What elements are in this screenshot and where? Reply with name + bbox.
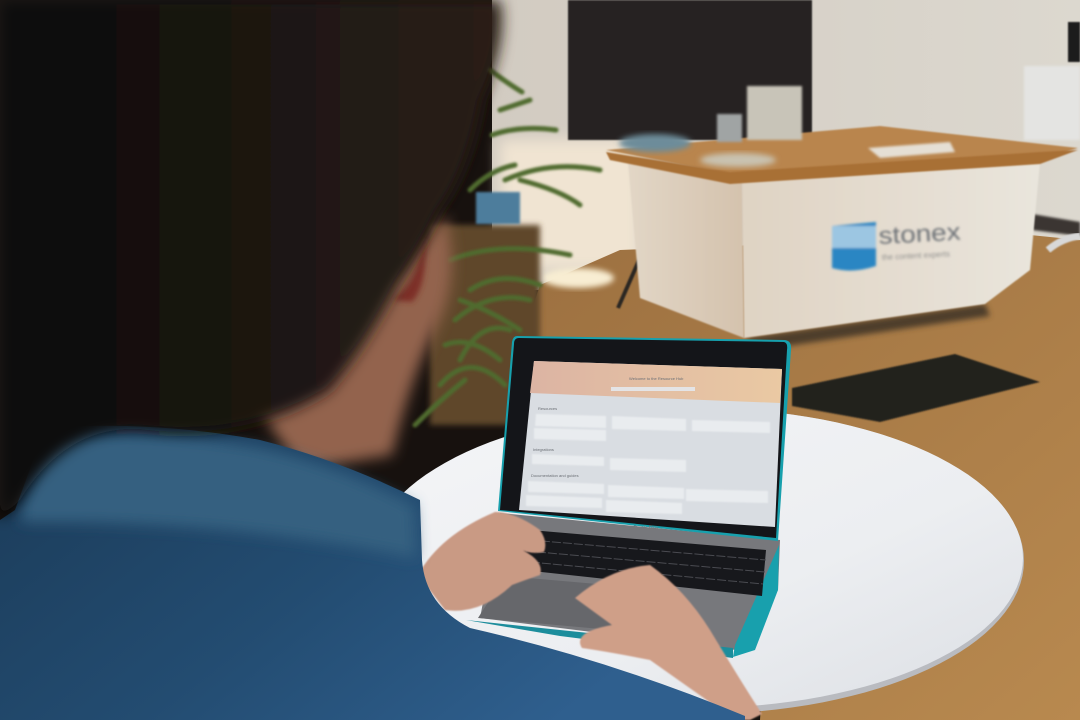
- desk shadow: [745, 304, 990, 350]
- keyboard: [520, 540, 766, 584]
- neck: [240, 215, 452, 470]
- dark wall screen: [568, 0, 812, 140]
- screen text: Welcome to the Resource Hub: [629, 376, 684, 381]
- chair object: [1048, 236, 1080, 250]
- wall poster: [1024, 66, 1080, 140]
- desk top edge: [606, 150, 1078, 184]
- screen cards: [526, 414, 770, 514]
- screen text: Documentation and guides: [531, 473, 579, 478]
- person: [0, 0, 745, 720]
- screen text: Resources: [538, 406, 557, 411]
- screen search bar: [611, 387, 695, 391]
- left hand: [418, 512, 545, 611]
- chair leg: [618, 258, 640, 308]
- trackpad: [478, 576, 620, 630]
- floor mat: [792, 354, 1040, 422]
- laptop: [466, 336, 791, 658]
- screen text: Integrations: [533, 447, 554, 452]
- desk top surface: [606, 126, 1078, 174]
- screen: [519, 361, 782, 527]
- desk front: [742, 162, 1040, 338]
- base strip: [1032, 214, 1080, 236]
- hands: [418, 512, 762, 720]
- shirt base: [0, 426, 745, 720]
- model label: MacBook Pro: [622, 526, 659, 532]
- screen banner: [530, 361, 782, 403]
- sign: blue stonex logo: [832, 219, 961, 271]
- plant: [415, 70, 600, 425]
- dark wall object: [1068, 22, 1080, 62]
- sign: blue stonex logo: the content experts: [882, 249, 950, 262]
- laptop base: [480, 513, 780, 650]
- right hand and forearm: [575, 565, 762, 720]
- round white table: [371, 408, 1024, 714]
- hair: [0, 0, 502, 520]
- sign: blue stonex logo: stonex: [878, 219, 961, 250]
- desk items: [747, 86, 802, 140]
- lid: [498, 336, 791, 541]
- ear: [393, 235, 425, 302]
- desk side: [628, 162, 744, 338]
- shirt collar: [22, 434, 416, 558]
- reception desk: [606, 86, 1078, 350]
- screen text: [531, 376, 684, 478]
